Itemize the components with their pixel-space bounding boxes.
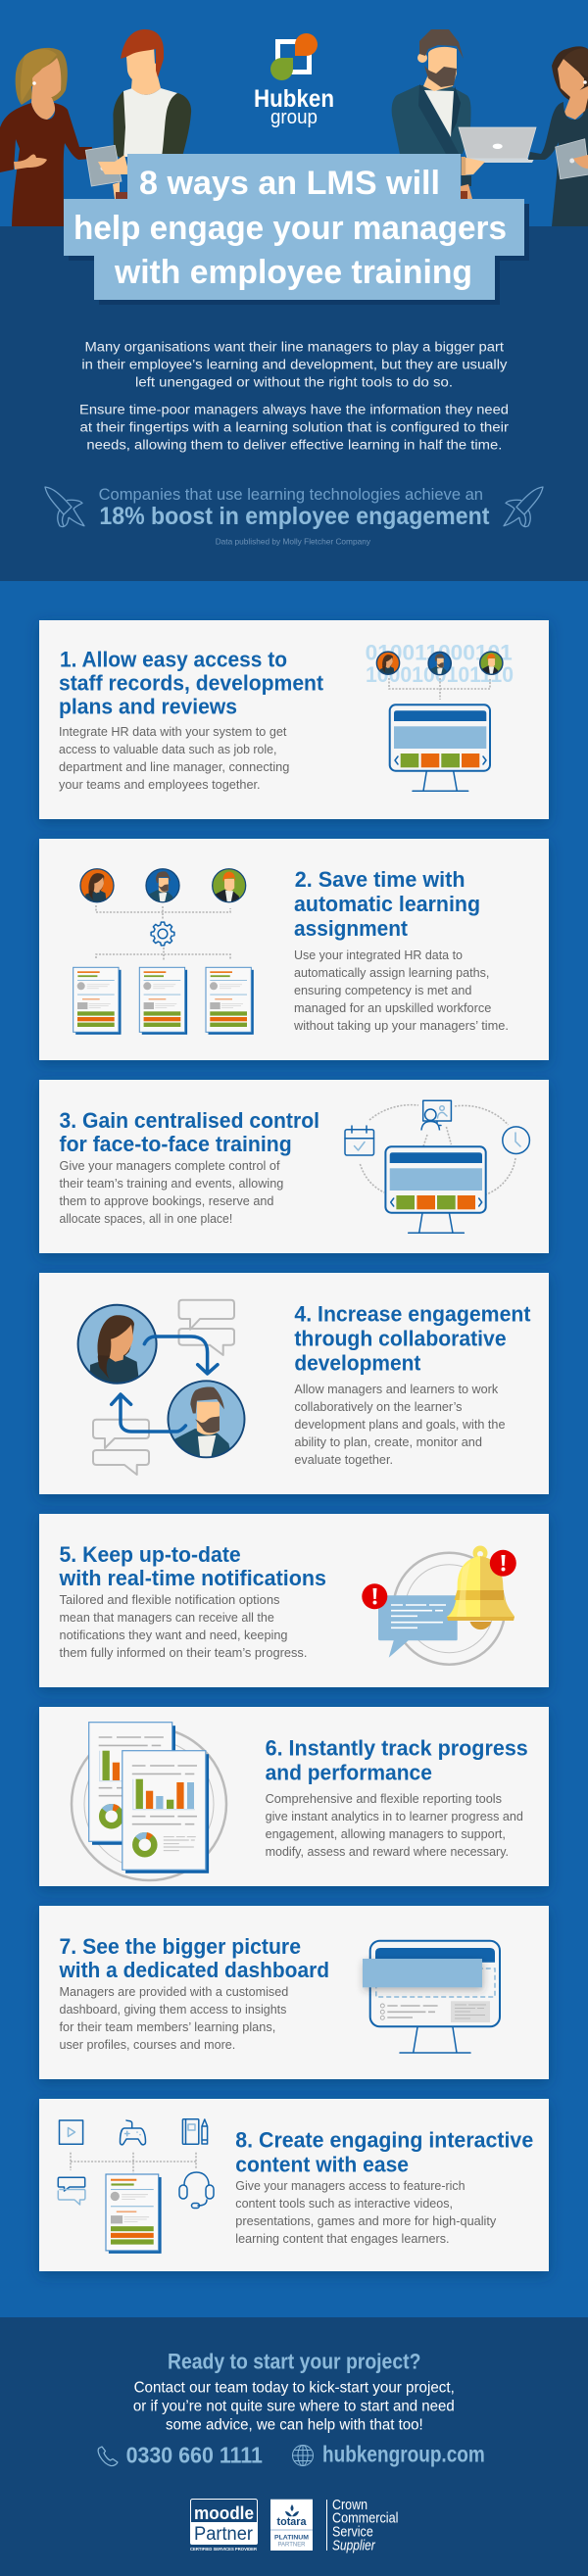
heading: staff records, development [59,671,324,696]
arrow: learner to manager [112,1394,185,1432]
heading: for face-to-face training [59,1132,292,1156]
icon: clock [503,1127,529,1153]
intro text: at their fingertips with a learning solution that is configured to their [80,420,509,436]
intro text: in their employee’s learning and development, but they are usually [81,358,508,373]
text block: Allow managers and learners to work [294,1382,499,1396]
text block: allocate spaces, all in one place! [59,1211,232,1226]
intro text: needs, allowing them to deliver effective learning in half the time. [86,438,502,454]
illustration: data to monitor [366,640,514,791]
text block: ability to plan, create, monitor and [294,1434,482,1449]
text block [293,948,509,1033]
heading: plans and reviews [59,694,237,718]
text block: without taking up your managers’ time. [293,1018,509,1033]
logo: Hubken group: Hubken [254,85,334,113]
heading: assignment [294,916,409,941]
logo: Hubken group [254,33,334,128]
text block: notifications they want and need, keeping [59,1628,288,1642]
footer heading: Ready to start your project? [168,2349,420,2373]
badge: crown commercial service supplier: Service [332,2525,373,2541]
heading [266,1735,528,1784]
text block: Give your managers access to feature-rich [235,2178,465,2193]
heading: content with ease [235,2152,409,2176]
icon: game controller [120,2120,145,2145]
illustration: dashboard monitor [363,1941,500,2053]
text block: mean that managers can receive all the [59,1610,274,1625]
illustration: man with red hair [85,29,191,199]
text block [59,724,289,792]
main blue background [0,581,588,2317]
illustration: data to monitor: 010011000101 [366,640,513,664]
illustration: reports [72,1723,226,1880]
illustration: data to monitor: 1000100101110 [366,662,514,687]
badge: crown commercial service supplier [326,2498,398,2553]
illustration: face-to-face control [345,1100,529,1233]
heading: with real-time notifications [59,1566,326,1590]
text block: for their team members’ learning plans, [59,2019,275,2034]
footer panel [0,2317,588,2576]
intro background band [0,226,588,581]
badge: crown commercial service supplier: Crown [332,2498,368,2513]
illustration: bearded man with laptop [392,29,536,199]
intro text: Many organisations want their line managers to play a bigger part [84,340,504,356]
icon: chat [58,2177,85,2205]
heading: with a dedicated dashboard [59,1958,329,1982]
text block: modify, assess and reward where necessary. [266,1844,509,1859]
badge: moodle partner [190,2499,258,2552]
heading [235,2127,533,2176]
footer text: or if you’re not quite sure where to start and need [133,2399,455,2415]
heading: 3. Gain centralised control [59,1108,319,1133]
text block: them to approve bookings, reserve and [59,1193,273,1208]
text block: access to valuable data such as job role, [59,742,276,756]
title banner: help engage your managers [74,210,507,247]
panel: 8 interactive content [39,2099,549,2271]
heading: 2. Save time with [295,867,465,892]
heading: and performance [266,1760,432,1784]
badge: totara platinum partner: PLATINUM [274,2536,309,2542]
illustration: woman with tablet [0,48,92,226]
badge: crown commercial service supplier: Supplier [332,2538,376,2553]
text block [59,1158,283,1226]
text block: Use your integrated HR data to [294,948,463,962]
intro text: left unengaged or without the right tools to do so. [135,375,453,391]
heading: automatic learning [294,892,480,916]
panel: 3 centralised control [39,1080,549,1253]
text block: ensuring competency is met and [294,983,471,997]
text block [235,2178,497,2246]
badge: moodle partner: moodle [194,2503,254,2523]
heading: 1. Allow easy access to [60,648,287,672]
heading: 4. Increase engagement [294,1301,531,1326]
illustration: collaboration [78,1300,244,1475]
stat callout: 18% boost [45,485,543,546]
badge: moodle partner: Partner [194,2524,254,2545]
intro text: Ensure time-poor managers always have the information they need [79,403,509,418]
icon: trainer at screen [421,1100,451,1131]
panel: 2 save time [39,839,549,1060]
text block: Give your managers complete control of [59,1158,280,1173]
text block: engagement, allowing managers to support, [266,1826,506,1841]
text block: Managers are provided with a customised [59,1984,288,1999]
heading [294,867,480,941]
text block [266,1791,523,1859]
illustration: bell and message [362,1546,516,1665]
text block: evaluate together. [294,1452,393,1467]
text block: learning content that engages learners. [235,2231,449,2246]
heading: 5. Keep up-to-date [59,1542,241,1567]
illustration: automatic assignment [74,869,254,1035]
stat callout: 18% boost: 18% boost in employee engagement [99,503,490,530]
title banner: 8 ways an LMS will [139,165,440,202]
footer text [133,2379,455,2434]
text block: Comprehensive and flexible reporting tools [266,1791,502,1806]
stat callout: 18% boost: Data published by Molly Fletcher Company [216,536,371,546]
icon: video [59,2120,83,2144]
website contact: hubkengroup.com [322,2442,485,2467]
panel: 6 track progress [39,1707,549,1886]
top background band [0,0,588,226]
logo: Hubken group: group [270,107,318,128]
text block: collaboratively on the learner’s [294,1399,463,1414]
icon: left rocket [45,487,84,527]
panel: 4 collaborative development [39,1273,549,1494]
text block: development plans and goals, with the [294,1417,506,1432]
text block [59,1592,307,1660]
badge: totara platinum partner [270,2500,313,2551]
heading: 7. See the bigger picture [59,1934,301,1959]
badge: totara platinum partner: PARTNER [278,2543,306,2549]
text block: your teams and employees together. [59,777,261,792]
arrow: manager to learner [144,1337,218,1374]
text block: managed for an upskilled workforce [294,1000,491,1015]
footer text: some advice, we can help with that too! [166,2417,423,2434]
text block: give instant analytics in to learner progress and [266,1809,523,1823]
intro text [79,340,509,454]
heading: development [294,1350,421,1375]
text block: user profiles, courses and more. [59,2037,235,2052]
heading [59,648,324,718]
text block: their team’s training and events, allowing [59,1176,283,1191]
icon: notebook and pen [182,2119,208,2144]
footer text: Contact our team today to kick-start your project, [134,2379,455,2396]
text block: department and line manager, connecting [59,759,289,774]
title banner: with employee training [114,254,472,291]
text block: presentations, games and more for high-quality [235,2213,497,2228]
badge: totara platinum partner: totara [276,2516,307,2528]
panel: 5 notifications [39,1514,549,1687]
badge: moodle partner: CERTIFIED SERVICES PROVIDER [190,2547,258,2552]
heading: through collaborative [294,1326,507,1350]
text block [294,1382,506,1467]
badge: crown commercial service supplier: Commercial [332,2511,398,2527]
illustration: content tools [58,2119,214,2254]
text block: content tools such as interactive videos, [235,2196,453,2211]
panel: 1 allow easy access [39,620,549,819]
heading: 8. Create engaging interactive [235,2127,533,2152]
icon: right rocket [504,487,543,527]
heading [59,1542,326,1590]
heading: 6. Instantly track progress [266,1735,528,1760]
phone contact: 0330 660 1111 [126,2442,263,2467]
text block: them fully informed on their team’s progress. [59,1645,307,1660]
heading [59,1934,329,1982]
title banner [64,154,529,305]
heading [59,1108,319,1156]
text block: dashboard, giving them access to insights [59,2002,286,2017]
illustration: woman with dark hair and tablet [528,46,588,226]
text block: automatically assign learning paths, [294,965,489,980]
chat bubbles [93,1300,234,1475]
stat callout: 18% boost: Companies that use learning technologies achieve an [99,485,483,504]
heading [294,1301,531,1375]
text block [59,1984,288,2052]
panel: 7 dashboard [39,1906,549,2079]
icon: calendar [345,1126,374,1155]
icon: headset [179,2172,214,2209]
text block: Integrate HR data with your system to get [59,724,287,739]
text block: Tailored and flexible notification options [59,1592,280,1607]
